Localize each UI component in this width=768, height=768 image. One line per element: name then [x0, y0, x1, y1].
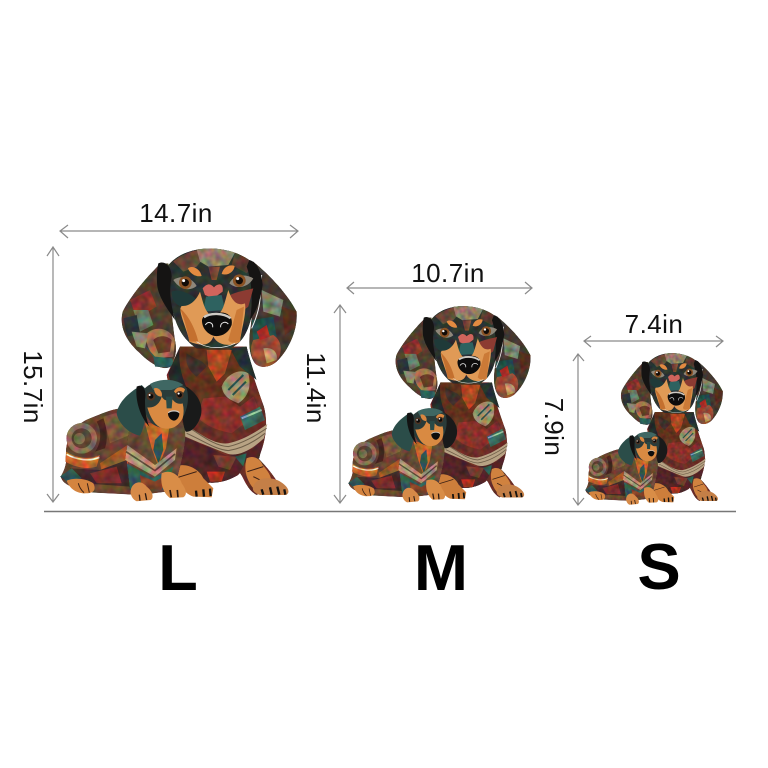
L height label: 15.7in — [18, 350, 48, 424]
M height label: 11.4in — [301, 352, 331, 424]
M height arrow — [334, 305, 346, 503]
size letter S: S — [637, 530, 681, 603]
S width label: 7.4in — [625, 309, 683, 339]
large dog illustration — [60, 248, 297, 501]
S height label: 7.9in — [539, 398, 569, 456]
S height arrow — [573, 354, 584, 505]
M width label: 10.7in — [411, 258, 485, 288]
baseline — [44, 510, 736, 512]
L height arrow — [47, 247, 59, 502]
size letter L: L — [158, 531, 198, 604]
small dog illustration — [585, 353, 723, 505]
medium dog illustration — [348, 306, 531, 502]
S width arrow — [584, 336, 723, 347]
L width arrow — [60, 225, 298, 238]
size letter M: M — [414, 531, 468, 604]
L width label: 14.7in — [139, 198, 213, 228]
M width arrow — [347, 282, 532, 294]
